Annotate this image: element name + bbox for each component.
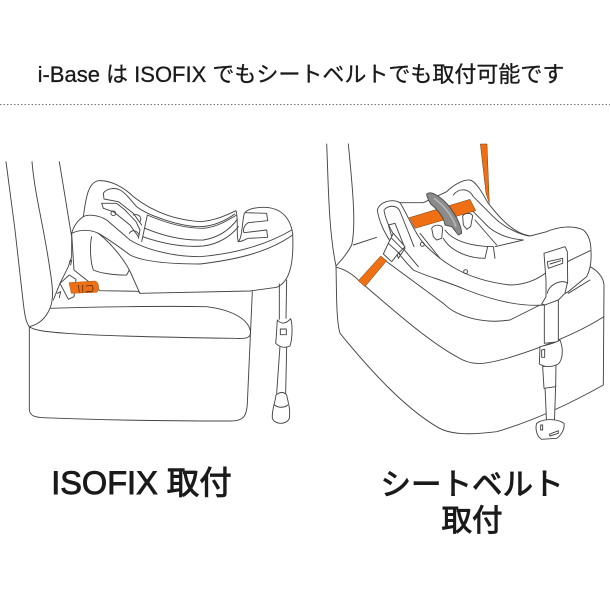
orange strap across base: [409, 199, 476, 228]
vehicle seat: [327, 144, 604, 434]
orange belt strap: [358, 144, 489, 287]
support leg: [536, 247, 568, 439]
illustration: ISOFIX installation: [6, 162, 293, 423]
seat belt base: [377, 180, 591, 305]
ISOFIX base: [72, 181, 293, 293]
grey belt lock: [427, 193, 462, 235]
label: seat belt: 取付: [442, 504, 502, 538]
support leg: [272, 280, 292, 423]
label: seat belt: [380, 468, 564, 538]
vehicle seat: [6, 162, 252, 421]
title: i-Base は ISOFIX でもシートベルトでも取付可能です: [38, 62, 564, 87]
label: seat belt: シートベルト: [380, 468, 564, 502]
illustration: seat belt installation: [327, 144, 604, 439]
belt buckle: [383, 233, 405, 262]
ISOFIX connector: [57, 260, 99, 299]
label: ISOFIX: ISOFIX 取付: [51, 465, 232, 501]
